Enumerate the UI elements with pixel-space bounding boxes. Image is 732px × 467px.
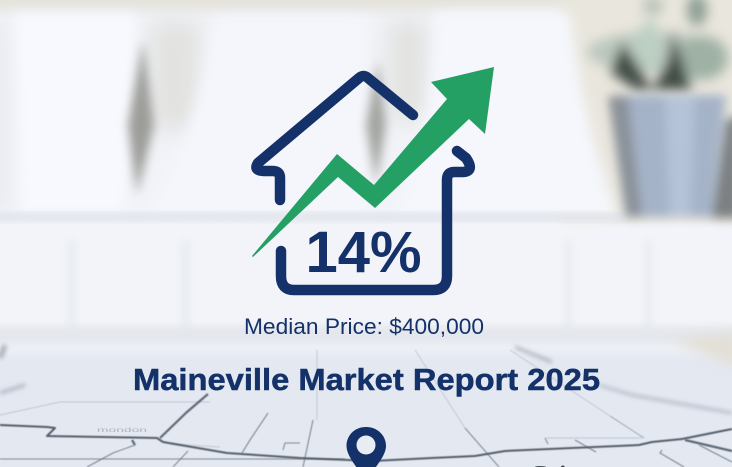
icon: map pin — [346, 427, 386, 467]
house outline: roof — [256, 76, 413, 200]
house and arrow icon — [252, 67, 494, 290]
map main road — [0, 425, 732, 461]
house outline: walls — [281, 151, 470, 290]
median price text: Median Price: $400,000 — [244, 314, 484, 339]
map thin roads — [0, 413, 732, 467]
map faded roads — [0, 345, 732, 413]
sofa body — [0, 224, 732, 329]
growth arrow — [252, 67, 494, 257]
pillow shadow areas — [0, 20, 428, 210]
vase — [608, 95, 732, 218]
map at the bottom — [0, 326, 732, 467]
map labels: mondon — [97, 428, 147, 434]
plant — [587, 0, 728, 90]
pillow creases — [128, 40, 386, 195]
pillows — [16, 12, 618, 218]
map fog — [0, 326, 732, 344]
map branch roads — [132, 394, 732, 451]
14% figure: 14% — [305, 220, 422, 285]
report title: Maineville Market Report 2025 — [133, 362, 600, 397]
